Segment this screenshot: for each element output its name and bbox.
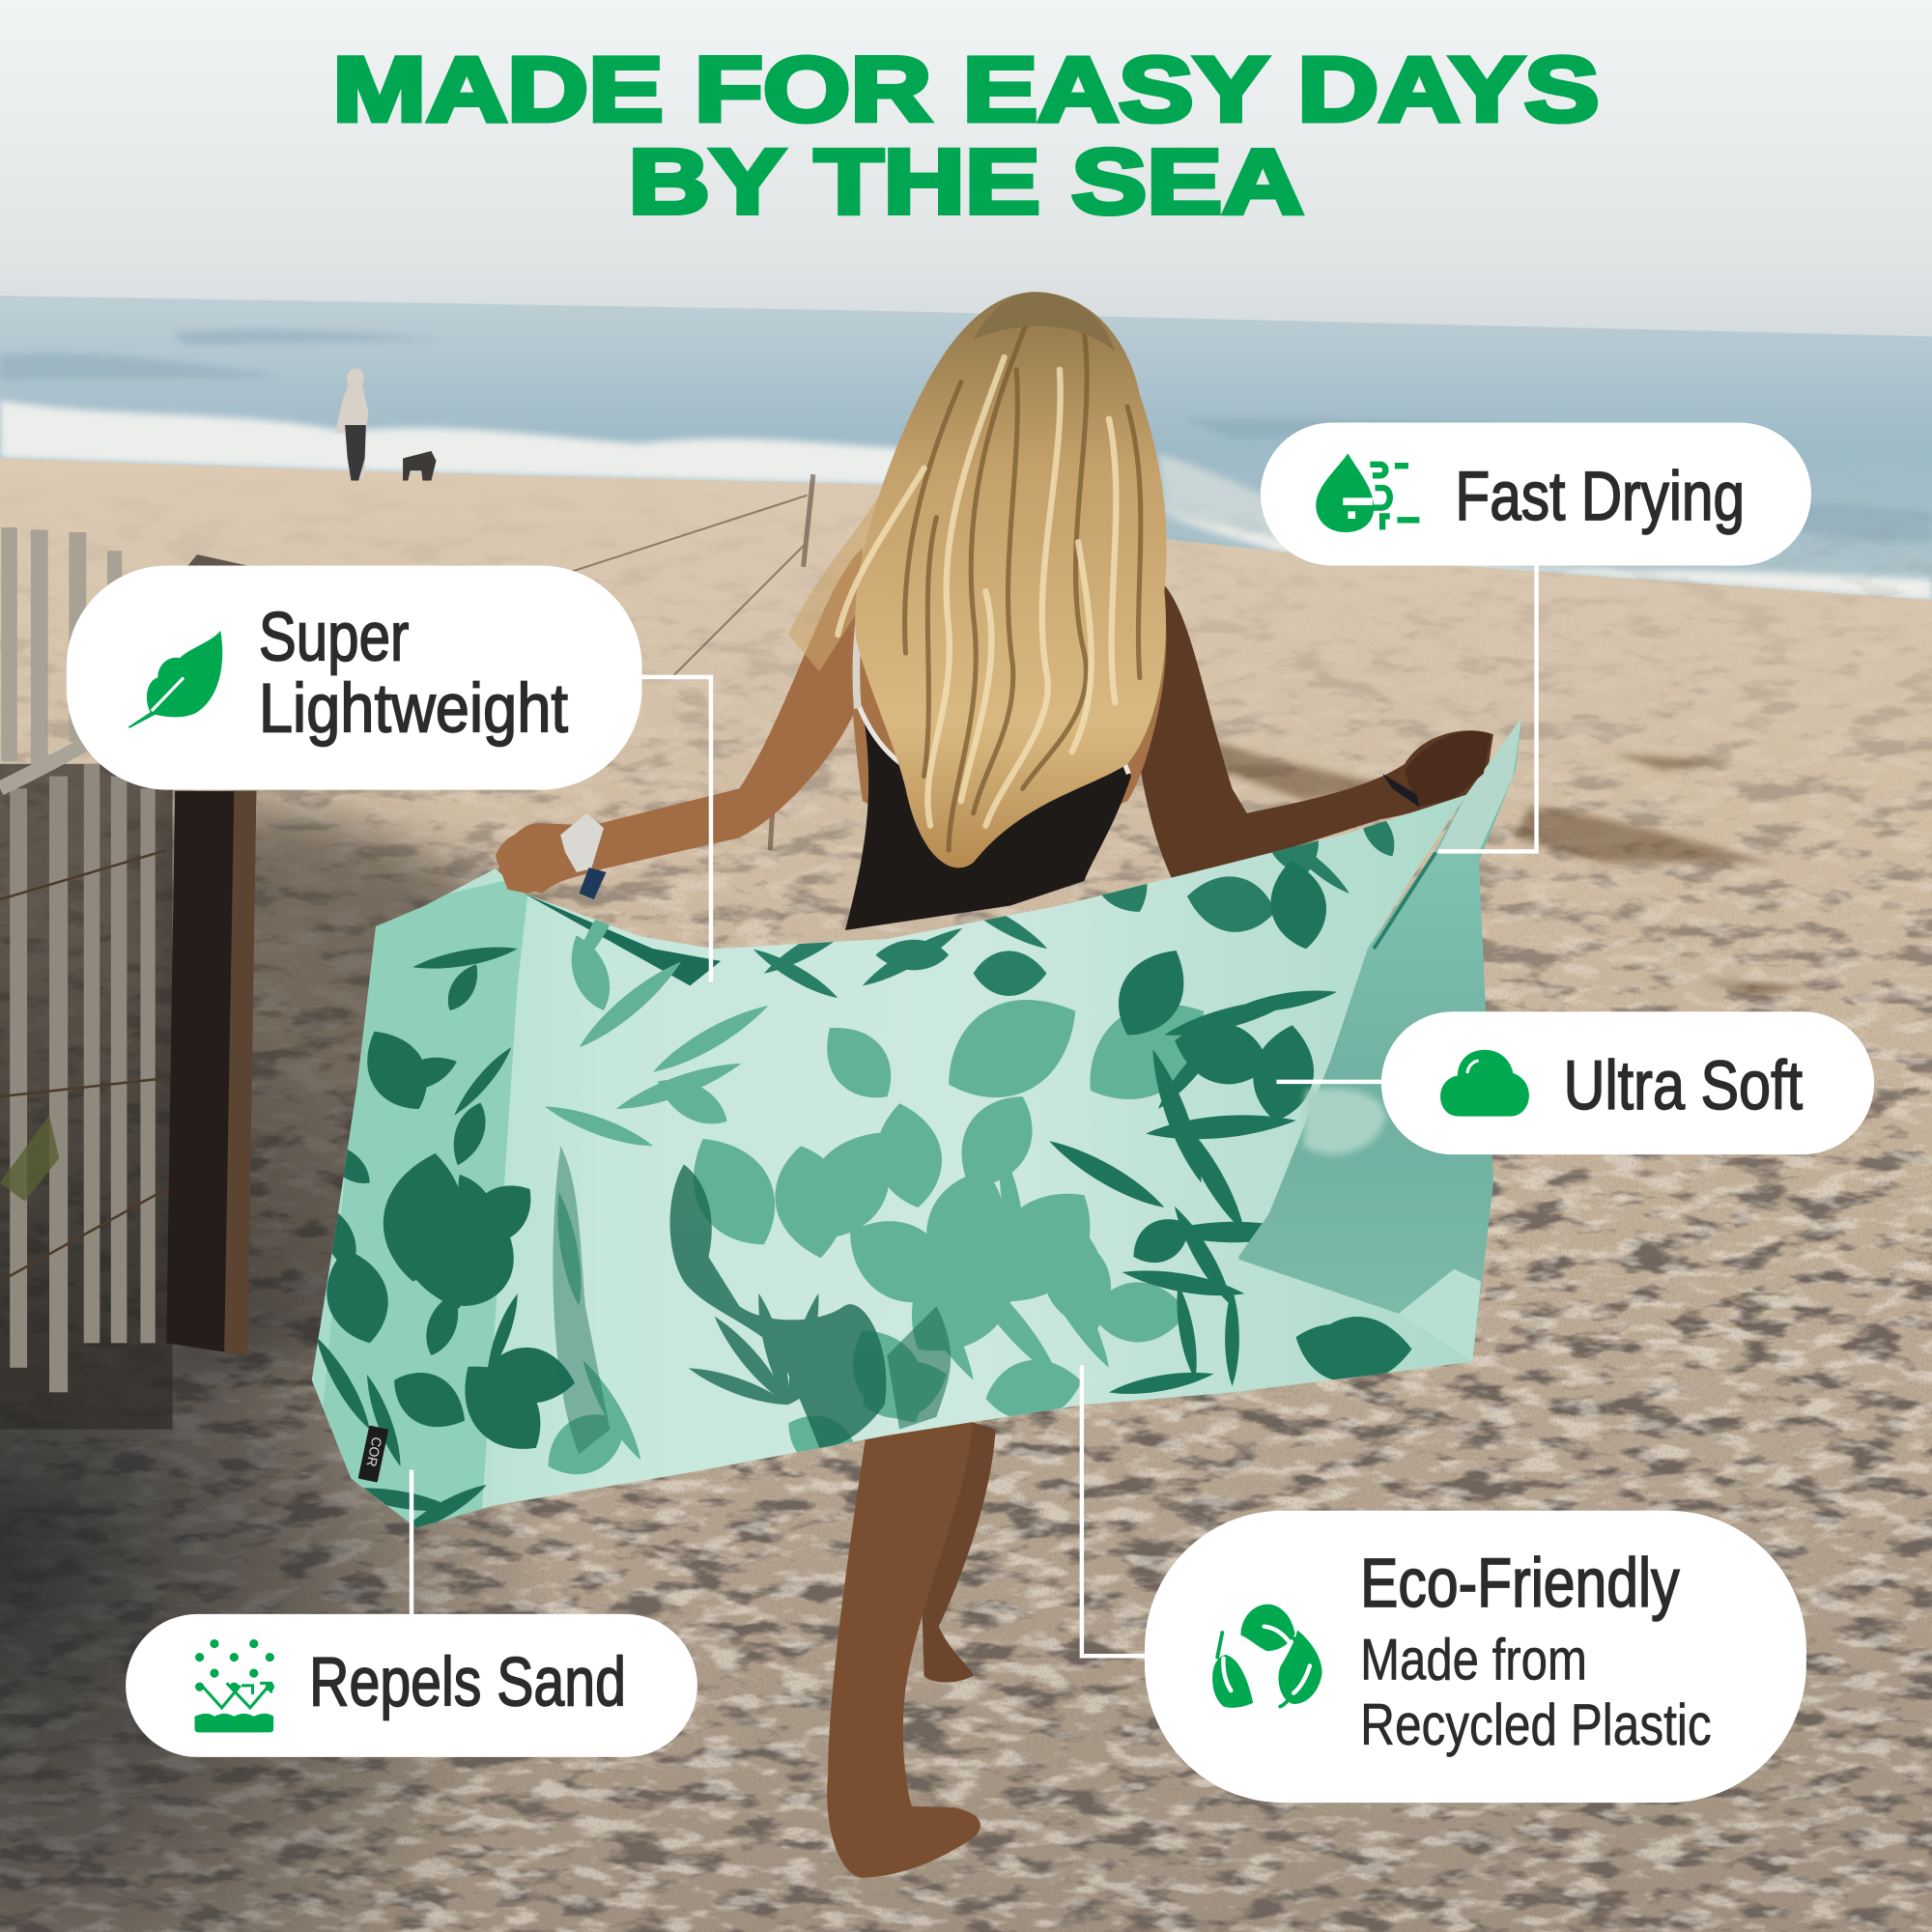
pill (1261, 423, 1811, 565)
towel label (358, 1426, 388, 1483)
fence wire (549, 474, 813, 850)
callout: super lightweight (67, 565, 642, 790)
towel label: COR (363, 1435, 385, 1468)
icon: sand repelling (195, 1639, 274, 1732)
left arm (498, 549, 863, 894)
pill (126, 1614, 697, 1757)
pill (1381, 1011, 1874, 1154)
towel back corner (1238, 717, 1521, 1361)
title line 2: BY THE SEA (629, 132, 1303, 234)
sky (0, 0, 1932, 357)
text: Fast Drying (1455, 458, 1745, 535)
towel folded flap (1238, 853, 1493, 1361)
callout: eco-friendly (1145, 1511, 1806, 1803)
foam (0, 401, 912, 486)
back (851, 554, 1166, 863)
connector: ultra soft (1276, 1080, 1381, 1084)
text: Lightweight (259, 670, 568, 748)
text: Repels Sand (309, 1643, 626, 1720)
connector: fast drying (1438, 565, 1537, 851)
callout: fast drying (1261, 423, 1811, 565)
title line 1: MADE FOR EASY DAYS (332, 40, 1600, 141)
text: Recycled Plastic (1360, 1692, 1712, 1757)
icon: recycle leaves (1212, 1605, 1322, 1708)
distant person and dog (335, 368, 437, 480)
dark leaves left (310, 941, 580, 1545)
left section mint panel (312, 875, 529, 1528)
waves (0, 329, 1932, 542)
sea (0, 296, 1932, 604)
icon: leaf (128, 631, 222, 728)
shadow of woman on towel (553, 1146, 951, 1454)
right arm (1132, 579, 1493, 899)
callout: repels sand (126, 1614, 697, 1757)
icon: drop with wind (1316, 453, 1419, 532)
vignette bottom left (0, 936, 887, 1932)
title (332, 40, 1600, 234)
sand texture (0, 469, 1932, 1932)
text: Super (259, 599, 409, 676)
icon: cloud (1440, 1050, 1529, 1117)
woman legs (827, 1417, 996, 1878)
left dune shade (160, 801, 554, 1380)
connector: eco-friendly (1082, 1365, 1145, 1656)
pill (67, 565, 642, 790)
text: Made from (1360, 1628, 1587, 1692)
hand (496, 829, 569, 894)
upper band leaves (753, 821, 1395, 999)
callout: ultra soft (1381, 1011, 1874, 1154)
fence post (166, 791, 256, 1355)
hair (788, 292, 1167, 867)
text: Ultra Soft (1564, 1047, 1803, 1124)
seaweed line (1208, 739, 1811, 996)
dark leaves right (1044, 856, 1411, 1400)
sand (0, 458, 1932, 1932)
shadow stripe between panels (524, 894, 721, 985)
connector: repels sand (410, 1470, 413, 1614)
medium leaves centre (545, 920, 1204, 1474)
connector: super lightweight (642, 677, 711, 982)
swimsuit (845, 549, 1131, 930)
text: Eco-Friendly (1360, 1545, 1680, 1622)
pill (1145, 1511, 1806, 1803)
fence (0, 527, 256, 1430)
watch (557, 813, 604, 872)
towel printed side (296, 788, 1528, 1552)
